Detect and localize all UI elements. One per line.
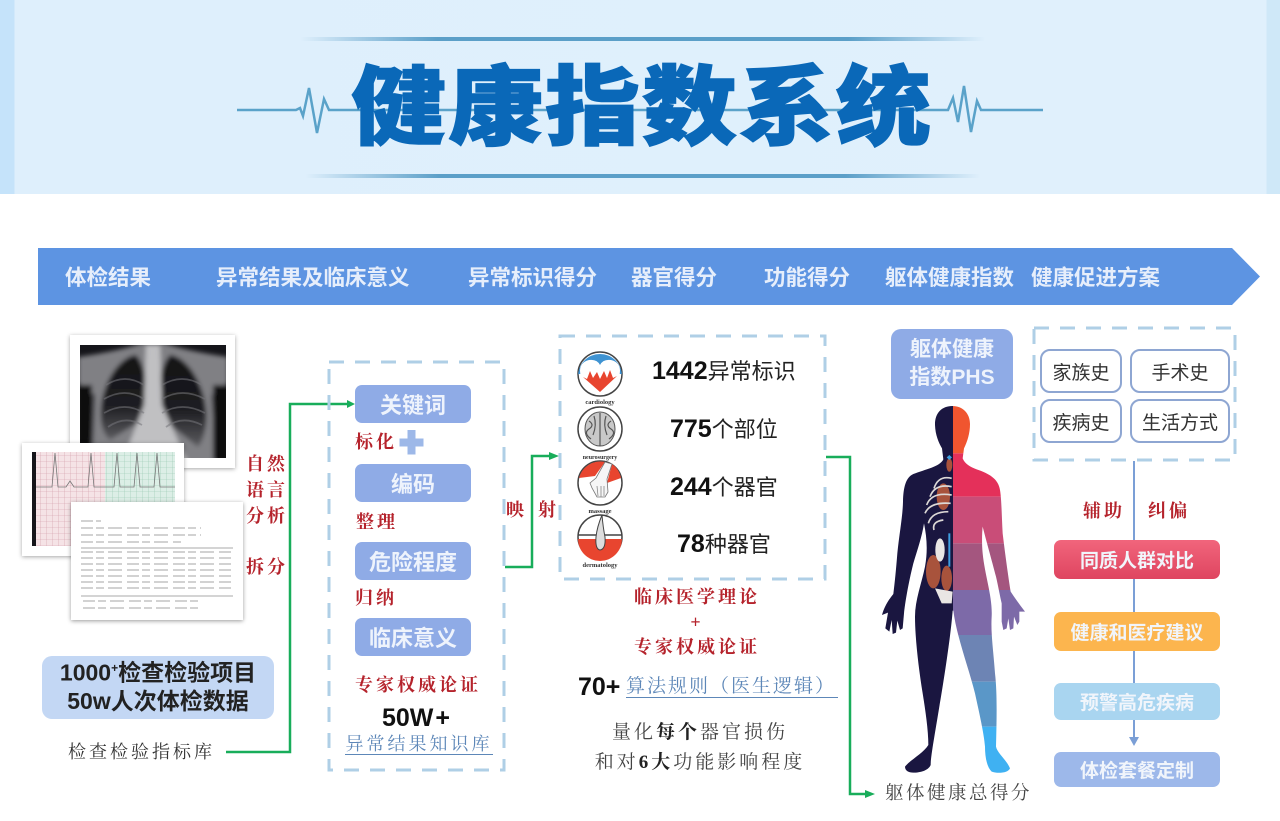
algorithm rules line — [578, 673, 838, 701]
red labels: assist and correct: 辅助 纠偏 — [1083, 501, 1190, 521]
peer comparison action — [1054, 540, 1220, 579]
quantification description: 和对6大功能影响程度 — [595, 752, 805, 773]
data volume badge — [42, 656, 274, 719]
stat: organs: 244个器官 — [670, 473, 778, 501]
custom checkup action: 体检套餐定制 — [1080, 761, 1194, 782]
icon: massage: massage — [588, 508, 612, 515]
clinical significance step: 临床意义 — [369, 626, 457, 651]
50W+ number: 50W+ — [382, 704, 450, 732]
surgery history: 手术史 — [1151, 362, 1208, 384]
indicator library label: 检查检验指标库 — [68, 742, 215, 762]
icon: dermatology — [577, 514, 623, 569]
quantification description — [595, 722, 805, 773]
stat: organ types: 78种器官 — [677, 530, 771, 558]
header banner — [0, 0, 1280, 194]
family history — [1040, 349, 1122, 393]
high-risk warning action — [1054, 683, 1220, 720]
disease history: 疾病史 — [1052, 412, 1110, 434]
health advice action: 健康和医疗建议 — [1070, 623, 1204, 644]
ribbon step labels: 躯体健康指数 — [885, 266, 1014, 290]
total score label: 躯体健康总得分 — [885, 784, 1032, 804]
keyword step: 关键词 — [380, 393, 446, 418]
custom checkup action — [1054, 752, 1220, 787]
chest x-ray — [67, 333, 238, 472]
coding step — [355, 464, 471, 502]
icon: neurosurgery — [577, 406, 623, 461]
red label: mapping: 映 射 — [506, 500, 556, 520]
title: 健康指数系统 — [351, 59, 933, 156]
red label: natural language analysis: 语言 — [246, 480, 288, 500]
icon: neurosurgery: neurosurgery — [583, 455, 617, 461]
red label: standardize: 标化 — [355, 432, 397, 452]
ribbon step labels — [65, 266, 1160, 290]
ribbon step labels: 功能得分 — [764, 266, 850, 290]
red label: clinical theory and expert review: + — [690, 612, 704, 632]
ribbon step labels: 异常结果及临床意义 — [216, 266, 410, 290]
process ribbon arrow — [38, 248, 1260, 305]
stat: body sites: 775个部位 — [670, 415, 778, 443]
stat: abnormal markers: 1442异常标识 — [652, 357, 796, 385]
surgery history — [1130, 349, 1230, 393]
health advice action — [1054, 612, 1220, 651]
red label: natural language analysis: 自然 — [246, 454, 288, 474]
PHS badge — [891, 329, 1013, 399]
high-risk warning action: 预警高危疾病 — [1080, 693, 1194, 714]
ribbon step labels: 健康促进方案 — [1031, 266, 1160, 290]
risk level step: 危险程度 — [369, 550, 457, 575]
clinical significance step — [355, 618, 471, 656]
family history: 家族史 — [1052, 362, 1110, 384]
knowledge base label: 异常结果知识库 — [346, 734, 492, 754]
icon: cardiology: cardiology — [585, 399, 615, 406]
ribbon step labels: 异常标识得分 — [468, 266, 597, 290]
algorithm rules line: 70+ — [578, 673, 620, 701]
red label: clinical theory and expert review — [634, 587, 760, 657]
data volume badge: 50w人次体检数据 — [67, 688, 249, 714]
red label: natural language analysis: 分析 — [246, 506, 288, 526]
lifestyle: 生活方式 — [1142, 412, 1218, 434]
red label: clinical theory and expert review: 临床医学理论 — [634, 587, 760, 607]
plus icon — [400, 430, 424, 454]
red label: clinical theory and expert review: 专家权威论证 — [634, 637, 760, 657]
quantification description: 量化每个器官损伤 — [612, 722, 788, 743]
red label: expert review: 专家权威论证 — [355, 675, 481, 695]
ribbon step labels: 体检结果 — [65, 266, 151, 290]
red label: organize: 整理 — [356, 512, 398, 532]
icon: dermatology: dermatology — [582, 562, 618, 569]
PHS badge: 躯体健康 — [910, 338, 994, 361]
red label: induction: 归纳 — [355, 588, 397, 608]
risk level step — [355, 542, 471, 580]
data volume badge: 1000+检查检验项目 — [60, 659, 256, 685]
algorithm rules line: 算法规则（医生逻辑） — [626, 676, 836, 697]
lab report — [68, 500, 246, 624]
icon: cardiology — [577, 351, 623, 406]
lifestyle — [1130, 399, 1230, 443]
icon: massage — [577, 460, 623, 515]
red label: split: 拆分 — [246, 557, 288, 577]
red label: natural language analysis — [246, 454, 288, 526]
ecg chart — [19, 441, 187, 560]
keyword step — [355, 385, 471, 423]
peer comparison action: 同质人群对比 — [1080, 551, 1194, 572]
coding step: 编码 — [391, 472, 435, 497]
disease history — [1040, 399, 1122, 443]
medical records image stack — [19, 333, 246, 624]
human body figure — [882, 406, 1025, 773]
history panel items — [1040, 349, 1230, 443]
heartbeat lines and rules — [237, 37, 1043, 178]
PHS badge: 指数PHS — [909, 366, 995, 389]
ribbon step labels: 器官得分 — [631, 266, 717, 290]
